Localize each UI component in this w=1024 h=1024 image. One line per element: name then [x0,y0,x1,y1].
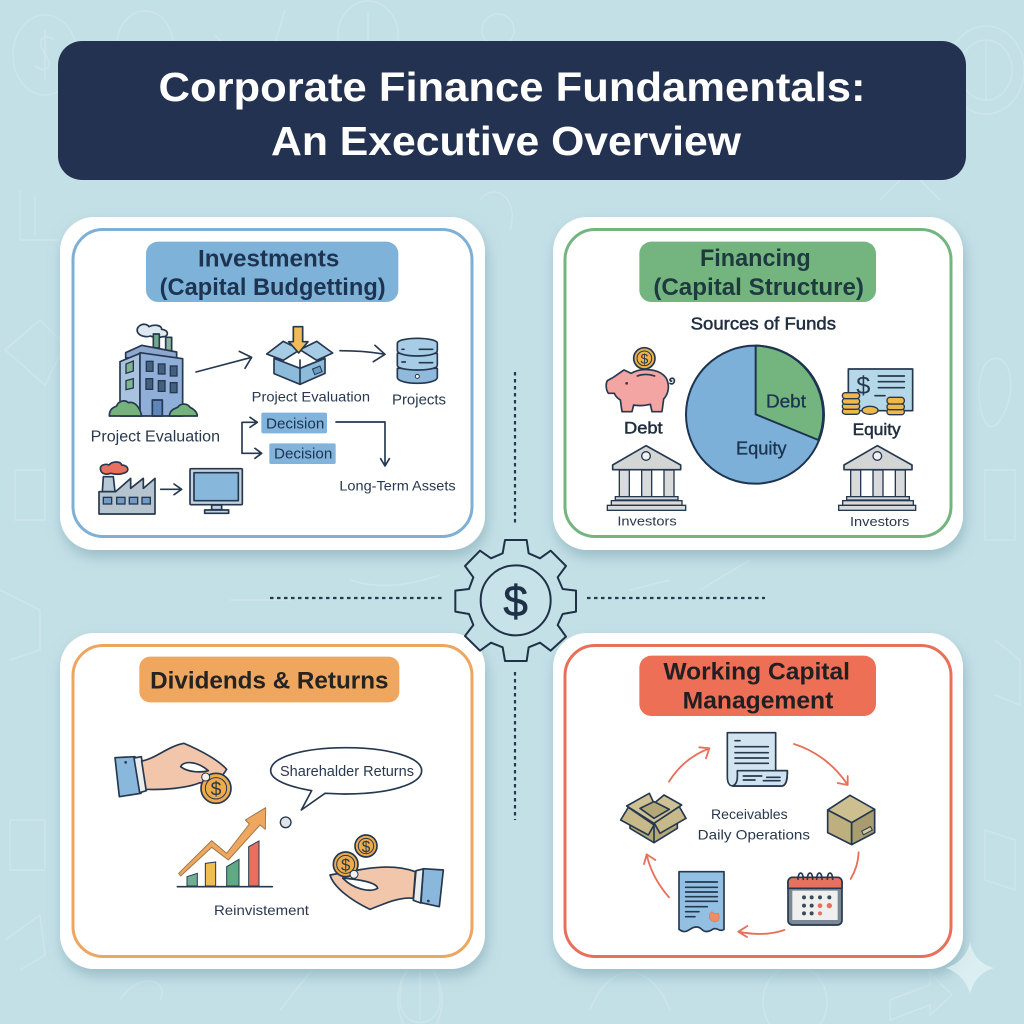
icon: hand giving coin [115,743,231,803]
icon: open box [621,793,686,843]
heading: working capital: Management [683,687,833,714]
heading: dividends: Dividends & Returns [150,668,388,695]
heading: dividends [139,657,399,702]
title banner: An Executive Overview [271,118,741,164]
icon: closed box [828,795,875,845]
arrow: box to projects [340,345,385,362]
decision chip two [269,443,336,464]
label: long-term assets: Long-Term Assets [339,478,456,494]
label: investors left: Investors [617,514,677,529]
icon: sparkle [946,942,994,994]
icon: invoice document [727,733,787,786]
icon: central gear with dollar [455,540,576,661]
label: daily operations: Daily Operations [698,826,810,842]
heading: financing [639,242,876,302]
icon: monitor [190,469,242,513]
icon: open box with arrow [267,327,333,384]
pie chart: Equity [736,437,787,458]
icon: cheque and coins: $ [856,372,870,400]
heading: financing: (Capital Structure) [653,274,864,301]
heading: working capital [639,656,876,716]
callout: shareholder returns: Sharehalder Returns [280,764,414,780]
label: debt: Debt [624,418,663,437]
decision chip one: Decision [266,416,324,432]
icon: growth bar chart [177,808,272,887]
icon: cheque and coins [842,369,913,415]
label: project evaluation left: Project Evaluation [91,429,220,446]
label: project evaluation: Project Evaluation [252,389,370,405]
heading: working capital: Working Capital [663,658,850,685]
icon: bank left [607,446,686,510]
label: sources of funds: Sources of Funds [691,313,836,333]
arrow: factory to monitor [161,484,182,495]
icon: database [397,338,437,383]
heading: financing: Financing [700,245,811,272]
arrows: cycle [644,744,859,937]
icon: hand receiving coins: $ [341,856,350,875]
icon: piggy bank [606,348,674,412]
title banner: Corporate Finance Fundamentals: [158,64,866,110]
icon: factory [99,462,155,514]
panel: investments [60,217,485,550]
icon: hand receiving coins [330,835,443,909]
callout: shareholder returns [271,748,422,810]
decorative dot [280,817,291,828]
heading: investments: (Capital Budgetting) [160,274,386,301]
icon: calendar [788,873,842,925]
arrow: decision to long-term assets [336,422,389,466]
icon: receipt [679,872,724,932]
panel: financing [553,217,963,550]
icon: central gear with dollar: $ [503,577,528,626]
icon: bank right [839,446,916,510]
label: investors right: Investors [850,514,910,529]
arrow: building to box [196,351,252,372]
label: receivables: Receivables [711,806,788,822]
heading: investments: Investments [198,246,339,273]
decision chip one [261,413,327,433]
title banner [58,41,966,180]
panel: working capital [553,633,963,969]
pie chart [686,346,824,484]
icon: office building [109,324,197,416]
heading: investments [146,242,398,302]
icon: piggy bank: $ [640,351,648,367]
panel: dividends [60,633,485,969]
dashed connector lines [270,372,765,820]
decision chip two: Decision [274,447,332,463]
icon: hand giving coin: $ [211,780,222,801]
arrow: decision bracket [242,417,262,458]
label: projects: Projects [392,392,446,408]
label: reinvestment: Reinvistement [214,902,309,918]
pie chart: Debt [766,391,807,412]
icon: hand receiving coins: $ [362,839,371,856]
label: equity: Equity [853,420,901,439]
